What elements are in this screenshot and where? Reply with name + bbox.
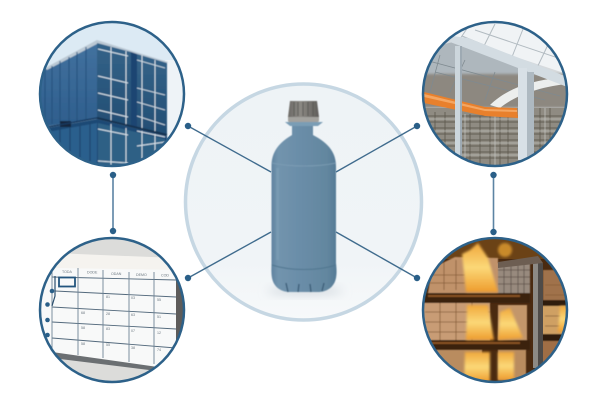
calendar text: 55 — [157, 298, 161, 302]
calendar text: 68 — [81, 311, 85, 315]
calendar text: COD — [161, 274, 169, 278]
photo: warehouse interior with orange duct — [420, 20, 570, 170]
calendar text: ODAN — [111, 272, 122, 276]
calendar text — [62, 270, 169, 352]
calendar text: 28 — [106, 312, 110, 316]
calendar text: 63 — [131, 313, 135, 317]
calendar text: TODA — [62, 270, 73, 274]
calendar text: 07 — [131, 329, 135, 333]
calendar text: 38 — [131, 346, 135, 350]
photo: shipping containers — [38, 20, 186, 168]
connector: warehouse to fire — [490, 172, 497, 235]
calendar text: DODE — [87, 270, 98, 274]
calendar text: 03 — [131, 296, 135, 300]
calendar highlighted cell — [59, 278, 75, 286]
calendar text: 12 — [157, 331, 161, 335]
central circle panel — [186, 84, 422, 320]
connector: bottom-left to bottle — [185, 232, 271, 281]
connector: top-left to bottle — [185, 123, 271, 172]
calendar text: 81 — [106, 295, 110, 299]
calendar text: 58 — [81, 342, 85, 346]
bottle shadow — [267, 288, 343, 294]
photo: burning pallets — [420, 235, 572, 385]
connector: containers to calendar — [110, 172, 116, 234]
calendar text: 58 — [81, 326, 85, 330]
calendar text: 83 — [106, 327, 110, 331]
calendar text: 74 — [157, 348, 161, 352]
calendar text: 51 — [157, 315, 161, 319]
binder holes — [45, 289, 54, 337]
calendar text: 55 — [106, 343, 110, 347]
calendar text: DEMO — [136, 273, 147, 277]
icon: blue bottle — [271, 101, 337, 292]
photo: wall planner calendar — [35, 235, 190, 385]
connector: bottom-right to bottle — [336, 232, 420, 281]
connector: top-right to bottle — [336, 123, 420, 172]
